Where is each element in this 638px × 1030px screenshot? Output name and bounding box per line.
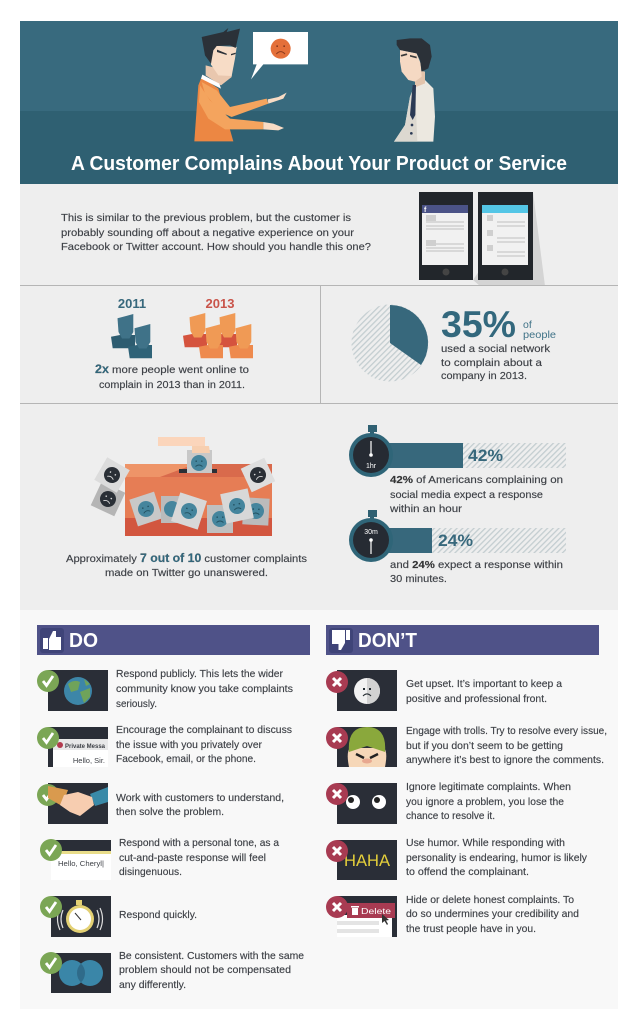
panel: 2011 vs 2013 (95, 296, 253, 391)
icon: blue people (111, 314, 152, 358)
stat text (441, 343, 551, 382)
icon: stopwatch 30m (349, 510, 393, 562)
don't item 5: Delete (361, 906, 391, 916)
text: 42% explanation: within an hour (389, 503, 463, 515)
do item 4: Respond with a personal tone, as a (119, 837, 279, 849)
don't item 5: Hide or delete honest complaints. To (406, 894, 574, 906)
heading: don't (326, 625, 599, 655)
don't item 3: you ignore a problem, you lose the (406, 796, 564, 808)
icon: thumbs up (43, 631, 61, 650)
icon: stopwatch 30m: 30m (364, 529, 378, 536)
panel: do and don't background (20, 610, 618, 1009)
text: 24% explanation: and 24% expect a response within (390, 559, 563, 571)
label: 2011: 2011 (118, 296, 146, 311)
caption: complain in 2013 than in 2011. (99, 379, 245, 391)
icon: thumbs down (332, 630, 350, 650)
value: 42% (468, 446, 503, 465)
heading: don't: DON’T (358, 630, 417, 652)
do item 4: disingenuous. (119, 866, 182, 878)
intro text: probably sounding off about a negative experience on your (61, 227, 355, 239)
speech bubble (251, 32, 308, 79)
icon: hand and card (158, 437, 212, 473)
do item 6: Be consistent. Customers with the same (119, 950, 304, 962)
label: 2013: 2013 (206, 296, 234, 311)
don't item 4: Use humor. While responding with (406, 837, 565, 849)
do item 1 (37, 668, 293, 711)
heading: do (37, 625, 310, 655)
illustration: listening manager (394, 38, 435, 142)
caption: Approximately 7 out of 10 customer complaints (66, 553, 307, 565)
don't item 2: Engage with trolls. Try to resolve every issue, (406, 725, 607, 737)
don't item 3 (326, 781, 571, 824)
do item 3: then solve the problem. (116, 806, 224, 818)
panel: grey background (20, 184, 618, 610)
icon: ballot box (125, 464, 272, 536)
intro text (61, 212, 371, 253)
do item 5 (40, 896, 197, 937)
don't item 5 (326, 894, 579, 937)
don't item 3: Ignore legitimate complaints. When (406, 781, 571, 793)
don't item 3: chance to resolve it. (406, 810, 495, 822)
don't item 2: anywhere it’s best to ignore the comments. (406, 754, 604, 766)
do item 2: Facebook, email, or the phone. (116, 753, 256, 765)
do item 3: Work with customers to understand, (116, 792, 284, 804)
do item 2 (37, 724, 292, 767)
stat text: to complain about a (441, 357, 542, 369)
chart: 24% bar (349, 510, 566, 562)
do item 4: Hello, Cheryl| (58, 859, 104, 868)
do item 2: Encourage the complainant to discuss (116, 724, 292, 736)
stat unit: people (523, 329, 556, 341)
stat text: company in 2013. (441, 370, 527, 382)
caption: 2x more people went online to (95, 364, 249, 376)
chart: 42% bar (349, 425, 566, 477)
text: 42% explanation: social media expect a response (390, 489, 543, 501)
text: 42% explanation (389, 474, 563, 515)
pie chart (352, 304, 428, 382)
do item 2: Hello, Sir. (73, 756, 105, 765)
don't item 4: personality is endearing, humor is likely (406, 852, 588, 864)
don't item 1 (326, 670, 562, 711)
do item 1: seriously. (116, 698, 157, 710)
don't item 2: but if you don’t seem to be getting (406, 740, 563, 752)
do item 6: problem should not be compensated (119, 964, 291, 976)
don't item 2 (326, 725, 607, 767)
icon: complaint cards (129, 488, 270, 533)
don't item 4 (326, 837, 588, 880)
text: 24% explanation (390, 559, 563, 585)
icon: stopwatch 1hr (349, 425, 393, 477)
don't item 1: positive and professional front. (406, 693, 547, 705)
icon: phones (419, 192, 545, 286)
icon: orange people (183, 313, 253, 358)
panel: header (20, 21, 618, 184)
stat unit: of (523, 319, 532, 331)
don't item 4: HAHA (344, 851, 391, 870)
text: 24% explanation: 30 minutes. (390, 573, 447, 585)
do item 1: community know you take complaints (116, 683, 293, 695)
don't item 5: do so undermines your credibility and (406, 908, 579, 920)
title: A Customer Complains About Your Product or Service (71, 153, 567, 175)
text: 42% explanation: 42% of Americans complaining on (390, 474, 563, 486)
heading: do: DO (69, 630, 98, 652)
caption: made on Twitter go unanswered. (105, 567, 268, 579)
icon: stopwatch 1hr: 1hr (366, 463, 377, 470)
don't item 1: Get upset. It’s important to keep a (406, 678, 562, 690)
caption (95, 364, 249, 391)
do item 4 (40, 837, 279, 880)
do item 5: Respond quickly. (119, 909, 197, 921)
intro text: This is similar to the previous problem, but the customer is (61, 212, 351, 224)
illustration: complaining customer (194, 28, 308, 141)
icon: phones: f (424, 207, 427, 214)
caption (66, 553, 307, 579)
do item 2: the issue with you privately over (116, 739, 262, 751)
do item 3 (37, 783, 284, 824)
do item 2: Private Messa (65, 743, 105, 750)
panel: complaint box (66, 437, 307, 579)
do item 4: cut-and-paste response will feel (119, 852, 266, 864)
panel: 35% stat (352, 304, 556, 382)
do item 6: any differently. (119, 979, 186, 991)
stat text: used a social network (441, 343, 551, 355)
value: 24% (438, 531, 473, 550)
do item 1: Respond publicly. This lets the wider (116, 668, 283, 680)
icon: outer dark cards (91, 457, 275, 516)
do item 6 (40, 950, 304, 993)
stat number: 35% (441, 304, 516, 345)
don't item 4: to offend the complainant. (406, 866, 529, 878)
intro text: Facebook or Twitter account. How should you handle this one? (61, 241, 371, 253)
don't item 5: the trust people have in you. (406, 923, 536, 935)
stat unit (523, 319, 556, 341)
